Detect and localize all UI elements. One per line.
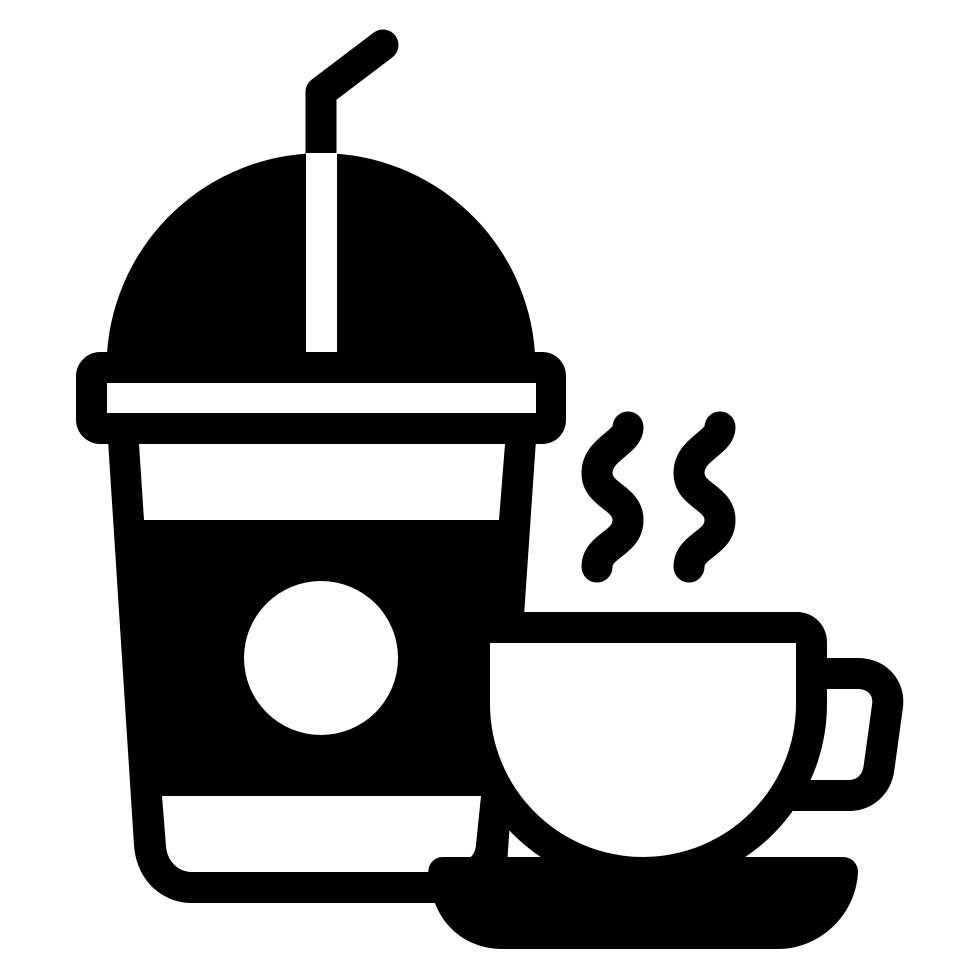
icon: saucer [428,857,858,949]
icon: coffee cup handle [780,674,888,796]
icon: lid rim [76,352,566,444]
icon: cup body [108,440,536,903]
icon: straw top [321,45,383,153]
icon: steam right [689,427,720,567]
icon: dome lid [107,153,535,353]
icon: coffee cup [459,612,827,888]
icon: steam left [597,427,628,567]
